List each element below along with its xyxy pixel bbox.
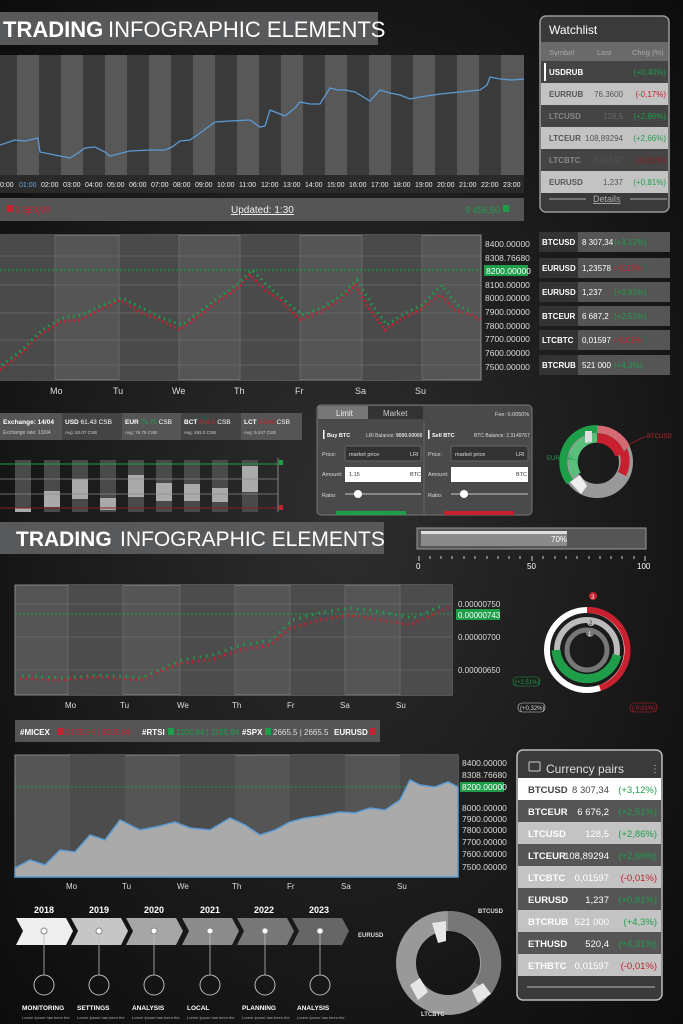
panel: order form: Price: [322,452,337,458]
line chart: intraday: 12:00 [261,182,279,189]
status bar: 9 456,60 [465,205,500,215]
timeline: Lorem Ipsum has been the [77,1015,125,1020]
panel: order form: Amount: [322,472,343,478]
ticker list: 521 000 [582,361,611,370]
ticker strip [15,720,380,742]
panel: currency pairs: (+2,51%) [618,807,657,818]
title 1: INFOGRAPHIC ELEMENTS [108,17,385,42]
line chart: intraday: 23:00 [503,182,521,189]
panel: watchlist: Details [593,194,621,204]
candlestick chart 1: Tu [113,386,123,396]
ticker strip: #MICEX [20,728,50,737]
ticker list: 6 687,2 [582,312,609,321]
ticker list: (-0,01%) [614,336,645,345]
title 2: TRADING [16,528,112,551]
area chart: 7900.00000 [462,814,507,824]
donut chart 2: 1 [588,632,592,638]
timeline: 2021 [200,905,220,915]
timeline: PLANNING [242,1005,276,1012]
candlestick chart 1: 8400.00000 [485,239,530,249]
timeline: LOCAL [187,1005,209,1012]
panel: watchlist: Watchlist [549,23,598,37]
timeline: Lorem Ipsum has been the [132,1015,180,1020]
timeline: Lorem Ipsum has been the [187,1015,235,1020]
timeline: Lorem Ipsum has been the [297,1015,345,1020]
line chart: intraday: 09:00 [195,182,213,189]
panel: order form: BTC Balance: 2.3149767 [474,433,530,439]
panel: watchlist [540,16,669,212]
panel: order form: market price [455,452,485,458]
candlestick chart 1: We [172,386,185,396]
panel: currency pairs: LTCEUR [528,851,566,862]
panel: watchlist: (+0,81%) [633,178,666,187]
panel: currency pairs: EURUSD [528,895,568,906]
candlestick chart 2: Sa [340,701,350,710]
panel: order form: LRI Balance: 9000.00000 [366,433,423,439]
candlestick chart 2: 0.00000700 [458,633,501,642]
candlestick chart 1: Sa [355,386,366,396]
panel: order form: Ratio: [322,493,337,499]
panel: order form: Market [383,409,408,418]
donut chart 2: 2 [589,621,593,627]
line chart: intraday: 10:00 [217,182,235,189]
line chart: intraday: 08:00 [173,182,191,189]
panel: order form: Price: [428,452,443,458]
area chart: 7700.00000 [462,837,507,847]
panel: order form: Limit [336,409,354,418]
panel: order form: BTC [516,472,527,478]
line chart: intraday: 16:00 [349,182,367,189]
ticker strip: #SPX [242,728,263,737]
panel: order form [317,405,532,515]
line chart: intraday: 05:00 [107,182,125,189]
line chart: intraday: 11:00 [239,182,256,189]
line chart: intraday: 15:00 [327,182,345,189]
candlestick chart 2: Su [396,701,406,710]
area chart: 7800.00000 [462,825,507,835]
panel: currency pairs [517,750,662,1000]
donut chart 1 [547,429,672,494]
candlestick chart 2 [15,585,501,710]
area chart: Su [397,882,407,891]
panel: order form: market price [349,452,379,458]
area chart: 8308.76680 [462,770,507,780]
status bar: 6 688,90 [15,205,50,215]
panel: order form: Ratio: [428,493,443,499]
panel: currency pairs: 6 676,2 [577,807,609,818]
line chart: intraday: 21:00 [459,182,477,189]
timeline: 2023 [309,905,329,915]
panel: watchlist: 128,5 [603,112,624,121]
panel: currency pairs: 520,4 [585,939,609,950]
ticker list: 0,01597 [582,336,611,345]
panel: watchlist: EURUSD [549,178,583,187]
candlestick chart 2: Fr [287,701,295,710]
panel: order form: LRI [410,452,419,458]
line chart: intraday: 18:00 [393,182,411,189]
candlestick chart 2: 0.00000743 [458,611,501,620]
line chart: intraday: 22:00 [481,182,499,189]
candlestick chart 2: Th [232,701,241,710]
panel: currency pairs: 108,89294 [564,851,609,862]
donut chart 2: (+2,51%) [515,680,540,686]
candlestick chart 1: 8308.76680 [485,253,530,263]
panel: watchlist: (-0,17%) [635,90,666,99]
panel: currency pairs: (+3,12%) [618,785,657,796]
panel: watchlist: 76.3600 [594,90,624,99]
area chart: 8400.00000 [462,758,507,768]
ticker list: LTCBTC [542,336,574,345]
candlestick chart 1: 7500.00000 [485,362,530,372]
line chart: intraday: 07:00 [151,182,169,189]
timeline: Lorem Ipsum has been the [242,1015,290,1020]
ticker strip: 1105.84 | 1105.84 [176,728,240,737]
area chart: Mo [66,882,78,891]
candlestick chart 1: Su [415,386,426,396]
candlestick chart 1: Fr [295,386,304,396]
panel: currency pairs: LTCBTC [528,873,565,884]
ticker strip: 3175.36 | 3205.84 [66,728,131,737]
timeline: ANALYSIS [297,1005,330,1012]
panel: order form: Amount: [428,472,449,478]
ticker list: BTCEUR [542,312,576,321]
panel: watchlist: LTCUSD [549,112,581,121]
candlestick chart 2: 0.00000650 [458,666,501,675]
ticker list: EURUSD [542,288,576,297]
panel: currency pairs: 8 307,34 [572,785,609,796]
panel: currency pairs: (+4,31%) [618,939,657,950]
candlestick chart 1: 7700.00000 [485,334,530,344]
ticker list: BTCRUB [542,361,576,370]
donut chart 3: BTCUSD [478,909,504,915]
panel: watchlist: 1,237 [603,178,624,187]
ticker list: (+4,3%) [614,361,643,370]
exchange rates bar [0,413,302,440]
line chart: intraday: 19:00 [415,182,433,189]
ticker strip: EURUSD [334,728,368,737]
exchange rates bar: Avg: 62.07 CSB [65,430,97,435]
panel: currency pairs: (+2,66%) [618,851,657,862]
title 2: INFOGRAPHIC ELEMENTS [120,528,385,551]
panel: watchlist: LTCEUR [549,134,581,143]
exchange rates bar: EUR 75.75 CSB [125,419,172,426]
donut chart 2: (+0,32%) [520,706,545,712]
panel: watchlist: USDRUB [549,68,583,77]
line chart: intraday: 13:00 [283,182,301,189]
donut chart 2: (-0,01%) [632,706,655,712]
status bar [0,198,524,221]
line chart: intraday: 17:00 [371,182,389,189]
panel: order form: LRI [516,452,525,458]
candlestick chart 1: 7900.00000 [485,307,530,317]
timeline: SETTINGS [77,1005,110,1012]
candlestick chart 2: Mo [65,701,77,710]
ticker strip: 2665.5 | 2665.5 [273,728,329,737]
progress bar: 70% [551,535,567,544]
donut chart 3: EURUSD [358,933,384,939]
panel: currency pairs: 0,01597 [575,961,609,972]
panel: currency pairs: 521 000 [575,917,609,928]
line chart: intraday: 01:00 [19,182,37,189]
area chart: Tu [122,882,131,891]
panel: order form: Fee: 0.0050% [495,412,529,418]
panel: currency pairs: BTCUSD [528,785,568,796]
exchange rates bar: LCT 9.246 CSB [244,419,290,426]
ticker list: EURUSD [542,264,576,273]
panel: currency pairs: ⋮ [650,764,660,775]
line chart: intraday: 20:00 [437,182,455,189]
candlestick chart 1: 8100.00000 [485,280,530,290]
area chart: Sa [341,882,351,891]
exchange rates bar: Avg: 493.3 CSB [184,430,216,435]
panel: watchlist: Symbol [549,48,574,57]
ticker strip: #RTSI [142,728,165,737]
panel: watchlist: LTCBTC [549,156,581,165]
ticker list: BTCUSD [542,238,576,247]
panel: currency pairs: BTCEUR [528,807,568,818]
candlestick chart 1: 7600.00000 [485,348,530,358]
panel: currency pairs: 1,237 [585,895,609,906]
ticker list: (+0,81%) [614,288,647,297]
area chart: 7600.00000 [462,849,507,859]
area chart: 8000.00000 [462,803,507,813]
exchange rates bar: USD 61.43 CSB [65,419,112,426]
candlestick chart 1: 8000.00000 [485,293,530,303]
panel: watchlist: Chng (%) [632,48,664,57]
line chart: intraday: 0:00 [0,182,14,189]
exchange rates bar: BCT 493.3 CSB [184,419,231,426]
panel: watchlist: (+2,66%) [633,134,666,143]
timeline: MONITORING [22,1005,64,1012]
line chart: intraday: 06:00 [129,182,147,189]
area chart: Fr [287,882,295,891]
panel: currency pairs: (-0,01%) [621,873,657,884]
panel: watchlist: EURRUB [549,90,583,99]
panel: watchlist: (-0,01%) [635,156,666,165]
panel: order form: Sell BTC [432,433,455,439]
progress bar [416,528,651,571]
candlestick chart 1: Mo [50,386,63,396]
candlestick chart 1: 7800.00000 [485,321,530,331]
panel: watchlist: Last [597,48,612,57]
panel: currency pairs: 0,01597 [575,873,609,884]
donut chart 3: LTCBTC [421,1012,445,1018]
line chart: intraday: 04:00 [85,182,103,189]
donut chart 1: EURUSD [547,456,573,462]
panel: currency pairs: LTCUSD [528,829,566,840]
exchange rates bar: Exchange rate: 13/04 [3,430,51,436]
ticker list: 8 307,34 [582,238,614,247]
panel: currency pairs: 128,5 [585,829,609,840]
donut chart 1: BTCUSD [647,434,672,440]
panel: currency pairs: (+0,81%) [618,895,657,906]
panel: order form: Buy BTC [327,433,350,439]
panel: watchlist: (+2,86%) [633,112,666,121]
candlestick chart 1: 8200.00000 [486,266,531,276]
candlestick chart 1: Th [234,386,245,396]
status bar: Updated: 1:30 [231,205,294,216]
progress bar: 0 [416,562,421,571]
progress bar: 100 [637,562,651,571]
line chart: intraday: 02:00 [41,182,59,189]
timeline: 2020 [144,905,164,915]
timeline: Lorem Ipsum has been the [22,1015,70,1020]
panel: currency pairs: BTCRUB [528,917,568,928]
candlestick chart 2: Tu [120,701,129,710]
title 1: TRADING [3,17,103,42]
line chart: intraday [0,55,524,193]
panel: watchlist: 0,01597 [594,156,624,165]
area chart: 7500.00000 [462,862,507,872]
timeline: 2022 [254,905,274,915]
candlestick chart 2: We [177,701,189,710]
ticker list: (+3,12%) [614,238,647,247]
panel: currency pairs: ETHBTC [528,961,567,972]
panel: watchlist: (+0,40%) [633,68,666,77]
panel: currency pairs: (+4,3%) [623,917,657,928]
donut chart 2 [513,592,657,712]
panel: currency pairs: ETHUSD [528,939,567,950]
bar chart [0,458,283,512]
panel: currency pairs: (+2,86%) [618,829,657,840]
timeline: ANALYSIS [132,1005,165,1012]
area chart: 8200.00000 [462,782,507,792]
exchange rates bar: Avg: 9.347 CSB [244,430,276,435]
title 1 [0,12,385,45]
panel: order form: 1.15 [349,472,360,478]
area chart: Th [232,882,241,891]
timeline: 2018 [34,905,54,915]
panel: currency pairs: Currency pairs [546,762,624,776]
title 2 [0,522,385,554]
line chart: intraday: 03:00 [63,182,81,189]
ticker list: (-0,17%) [614,264,645,273]
ticker list: 1,23578 [582,264,611,273]
panel: currency pairs: (-0,01%) [621,961,657,972]
donut chart 2: 3 [591,595,595,601]
candlestick chart 2: 0.00000750 [458,600,501,609]
area chart [15,755,507,891]
ticker list: (+2,51%) [614,312,647,321]
ticker list [539,232,670,375]
progress bar: 50 [527,562,536,571]
panel: watchlist: 108,89294 [585,134,624,143]
candlestick chart 1 [0,235,531,396]
panel: order form: BTC [410,472,421,478]
exchange rates bar: Exchange: 14/04 [3,419,54,426]
donut chart 3 [358,909,504,1018]
line chart: intraday: 14:00 [305,182,323,189]
area chart: We [177,882,189,891]
timeline [16,905,349,1020]
ticker list: 1,237 [582,288,603,297]
exchange rates bar: Avg: 76.76 CSB [125,430,157,435]
timeline: 2019 [89,905,109,915]
